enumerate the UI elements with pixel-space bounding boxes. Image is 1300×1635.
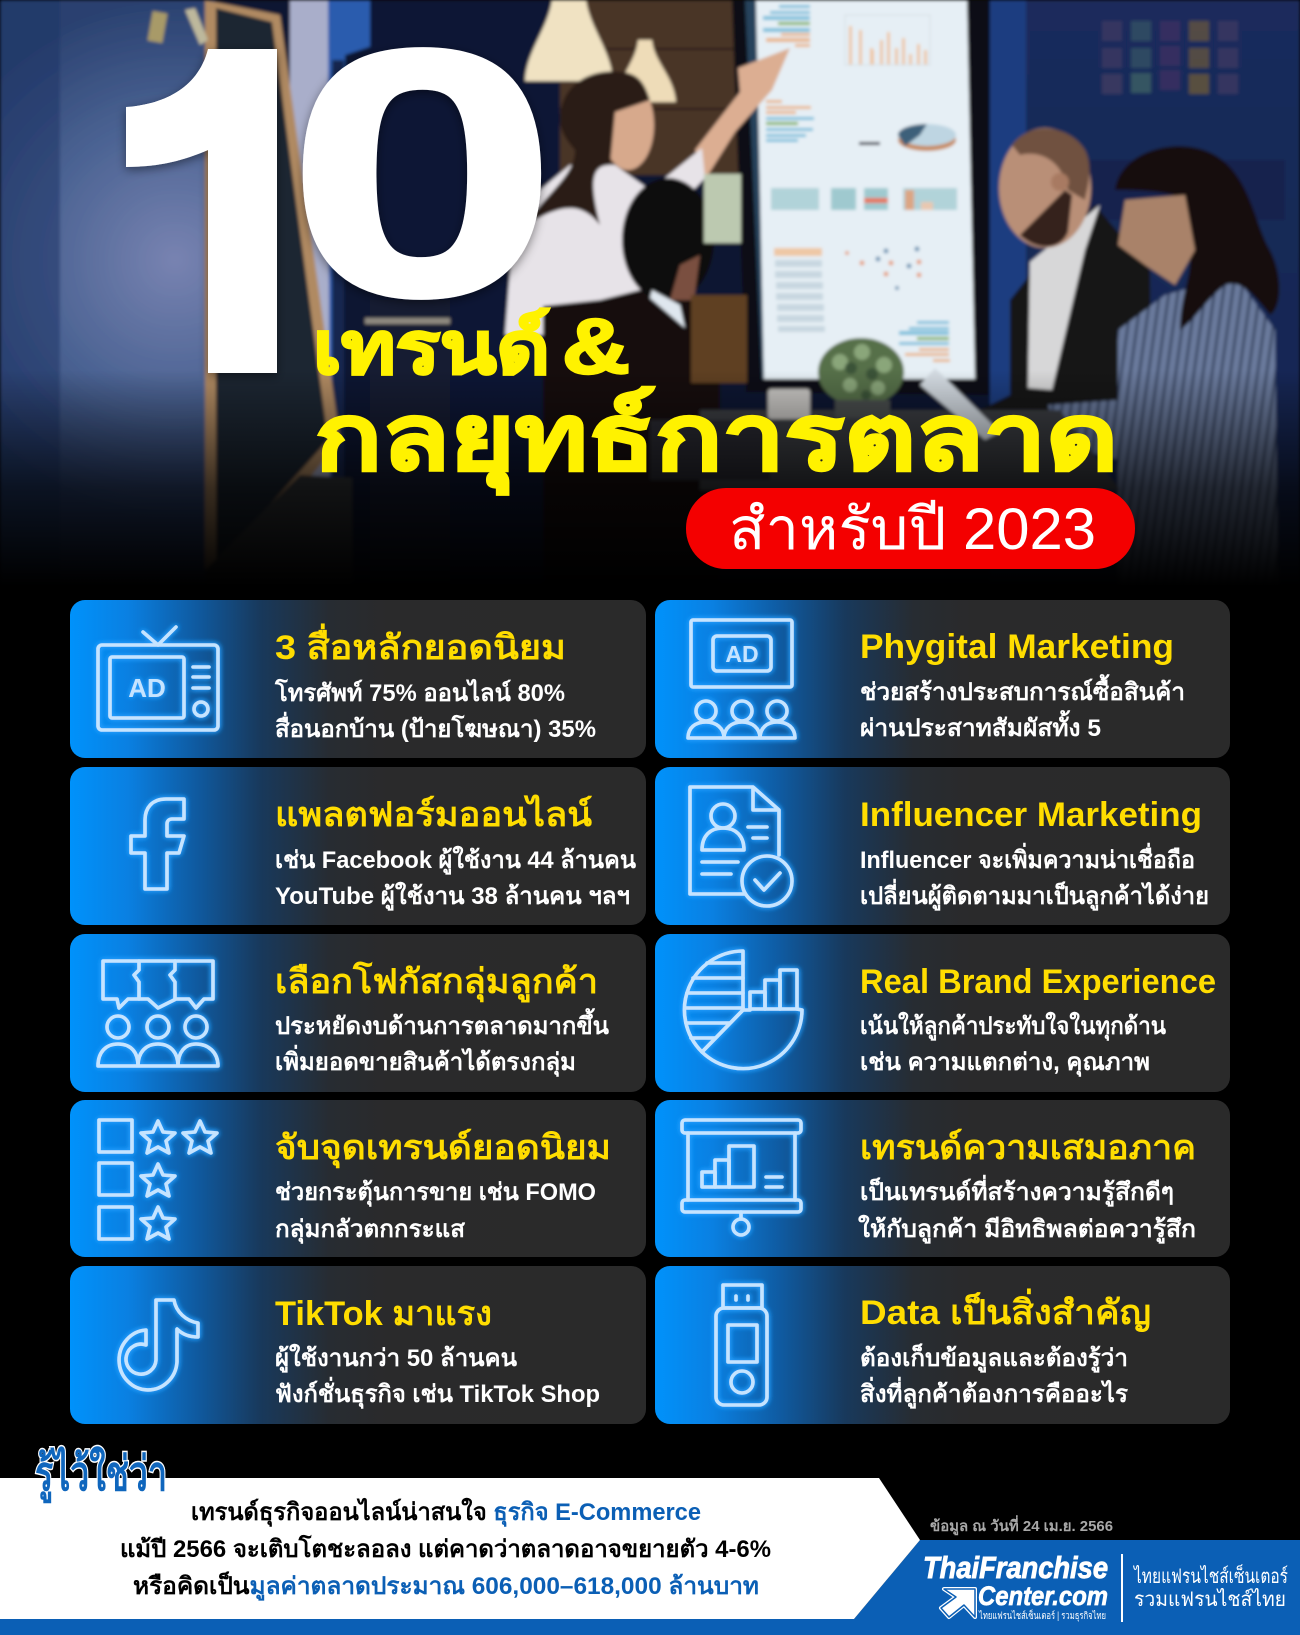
hero photo: team presenting at a screen in a dark office	[0, 0, 1300, 600]
banner text: เทรนด์ธุรกิจออนไลน์น่าสนใจ ธุรกิจ E-Commerce	[191, 1497, 701, 1528]
heading and text: เช่น ความแตกต่าง, คุณภาพ	[860, 1049, 1150, 1078]
bottom fade of hero into black	[0, 370, 1300, 605]
banner text: แม้ปี 2566 จะเติบโตชะลอลง แต่คาดว่าตลาดอาจขยายตัว 4-6%	[120, 1534, 771, 1563]
icon: USB drive	[716, 1285, 767, 1405]
heading and text: กลุ่มกลัวตกกระแส	[275, 1216, 465, 1245]
heading and text	[858, 1128, 1196, 1244]
title number 10	[120, 46, 548, 382]
heading and text: ช่วยกระตุ้นการขาย เช่น FOMO	[275, 1179, 596, 1208]
banner text: หรือคิดเป็นมูลค่าตลาดประมาณ 606,000–618,000 ล้านบาท	[133, 1571, 759, 1601]
logo tagline	[1132, 1563, 1288, 1611]
heading and text: 3 สื่อหลักยอดนิยม	[275, 623, 566, 667]
heading and text: Data เป็นสิ่งสำคัญ	[860, 1288, 1151, 1333]
right wall	[990, 0, 1300, 600]
panel: TikTok	[70, 1266, 646, 1424]
heading and text: แพลตฟอร์มออนไลน์	[275, 794, 592, 834]
heading and text: Phygital Marketing	[860, 628, 1174, 666]
logo: ThaiFranchise Center: Center.com	[978, 1581, 1108, 1611]
heading and text: Real Brand Experience	[860, 963, 1216, 1001]
heading and text: ผ่านประสาทสัมผัสทั้ง 5	[860, 709, 1101, 742]
logo tagline: รวมแฟรนไชส์ไทย	[1134, 1588, 1286, 1611]
logo divider	[1121, 1554, 1123, 1622]
panel: Influencer Marketing	[655, 767, 1230, 925]
man with beard	[980, 205, 1152, 410]
footer white banner with did-you-know text	[0, 1478, 920, 1619]
icon: profile document with check	[690, 787, 792, 906]
heading and text: Influencer จะเพิ่มความน่าเชื่อถือ	[860, 842, 1195, 874]
side monitor and bag	[704, 174, 741, 243]
heading and text	[860, 963, 1216, 1078]
icon: AD screen with audience	[688, 620, 795, 738]
heading and text: ฟังก์ชั่นธุรกิจ เช่น TikTok Shop	[275, 1376, 600, 1410]
title: trends and marketing strategy: &	[562, 302, 630, 390]
footer blue band	[0, 1540, 1300, 1635]
heading and text: เป็นเทรนด์ที่สร้างความรู้สึกดีๆ	[860, 1174, 1174, 1207]
heading and text: เพิ่มยอดขายสินค้าได้ตรงกลุ่ม	[275, 1044, 576, 1078]
woman with striped shirt	[1118, 275, 1278, 600]
icon: advertising TV	[98, 627, 218, 730]
heading and text: โทรศัพท์ 75% ออนไลน์ 80%	[274, 678, 565, 707]
panel: online platforms	[70, 767, 646, 925]
heading and text: ผู้ใช้งานกว่า 50 ล้านคน	[275, 1343, 518, 1373]
year badge: สำหรับปี 2023	[729, 497, 1096, 562]
seated braided colleague	[543, 290, 720, 600]
heading and text: TikTok มาแรง	[275, 1295, 492, 1333]
heading and text	[275, 1295, 600, 1410]
icon: pie chart and bars	[684, 951, 802, 1069]
icon: audience with speech bubbles	[98, 961, 218, 1066]
icon: facebook	[131, 799, 184, 889]
callout heading: did you know: รู้ไว้ใช่ว่า	[35, 1445, 167, 1504]
heading and text	[275, 794, 637, 911]
presenter	[695, 48, 790, 178]
panel: equality trend	[655, 1100, 1230, 1257]
heading and text: จับจุดเทรนด์ยอดนิยม	[275, 1128, 611, 1169]
panel: 3 main media	[70, 600, 646, 758]
heading and text	[274, 623, 596, 743]
icon: TikTok note	[119, 1300, 198, 1390]
panel: customer focus	[70, 934, 646, 1092]
title: trends and marketing strategy	[313, 302, 1118, 495]
icon: advertising TV: AD	[128, 673, 166, 703]
panel: data matters	[655, 1266, 1230, 1424]
heading and text: เปลี่ยนผู้ติดตามมาเป็นลูกค้าได้ง่าย	[860, 878, 1209, 911]
heading and text	[275, 961, 610, 1078]
screen charts	[763, 5, 957, 362]
heading and text: ต้องเก็บข้อมูลและต้องรู้ว่า	[860, 1343, 1128, 1373]
heading and text	[275, 1128, 611, 1245]
heading and text: ให้กับลูกค้า มีอิทธิพลต่อควารู้สึก	[858, 1214, 1196, 1244]
panel: Phygital Marketing	[655, 600, 1230, 758]
heading and text: สิ่งที่ลูกค้าต้องการคืออะไร	[860, 1376, 1128, 1409]
heading and text: ช่วยสร้างประสบการณ์ซื้อสินค้า	[860, 673, 1185, 706]
radiator	[205, 475, 352, 597]
year badge	[686, 488, 1135, 569]
heading and text: สื่อนอกบ้าน (ป้ายโฆษณา) 35%	[275, 711, 596, 743]
icon: logo arrow	[941, 1589, 975, 1617]
logo: ThaiFranchise Center: ThaiFranchise	[923, 1550, 1108, 1585]
heading and text: เน้นให้ลูกค้าประทับใจในทุกด้าน	[860, 1011, 1167, 1042]
banner text	[120, 1497, 771, 1601]
title: trends and marketing strategy: เทรนด์	[313, 308, 550, 389]
icon: checklist with stars	[99, 1120, 217, 1239]
icon: AD screen with audience: AD	[725, 641, 759, 667]
heading and text: ประหยัดงบด้านการตลาดมากขึ้น	[275, 1007, 610, 1040]
panel: popular trends	[70, 1100, 646, 1257]
logo: ThaiFranchise Center: ไทยแฟรนไชส์เซ็นเตอร์ | รวมธุรกิจไทย	[978, 1608, 1106, 1622]
pendant lamps	[525, 0, 613, 81]
heading and text	[860, 1288, 1151, 1409]
heading and text: YouTube ผู้ใช้งาน 38 ล้านคน ฯลฯ	[275, 881, 630, 911]
screen frame	[732, 0, 990, 395]
data source date: ข้อมูล ณ วันที่ 24 เม.ย. 2566	[930, 1515, 1113, 1536]
title: trends and marketing strategy: กลยุทธ์การตลาด	[315, 386, 1118, 495]
heading and text	[860, 796, 1209, 911]
table with plant and mug	[700, 410, 1120, 490]
logo: ThaiFranchise Center	[923, 1550, 1108, 1622]
icon: presentation board	[682, 1120, 801, 1235]
heading and text: เทรนด์ความเสมอภาค	[860, 1128, 1196, 1167]
heading and text: Influencer Marketing	[860, 796, 1202, 834]
heading and text: เลือกโฟกัสกลุ่มลูกค้า	[275, 961, 598, 1003]
heading and text	[860, 628, 1185, 742]
heading and text: เช่น Facebook ผู้ใช้งาน 44 ล้านคน	[275, 845, 637, 875]
panel: Real Brand Experience	[655, 934, 1230, 1092]
